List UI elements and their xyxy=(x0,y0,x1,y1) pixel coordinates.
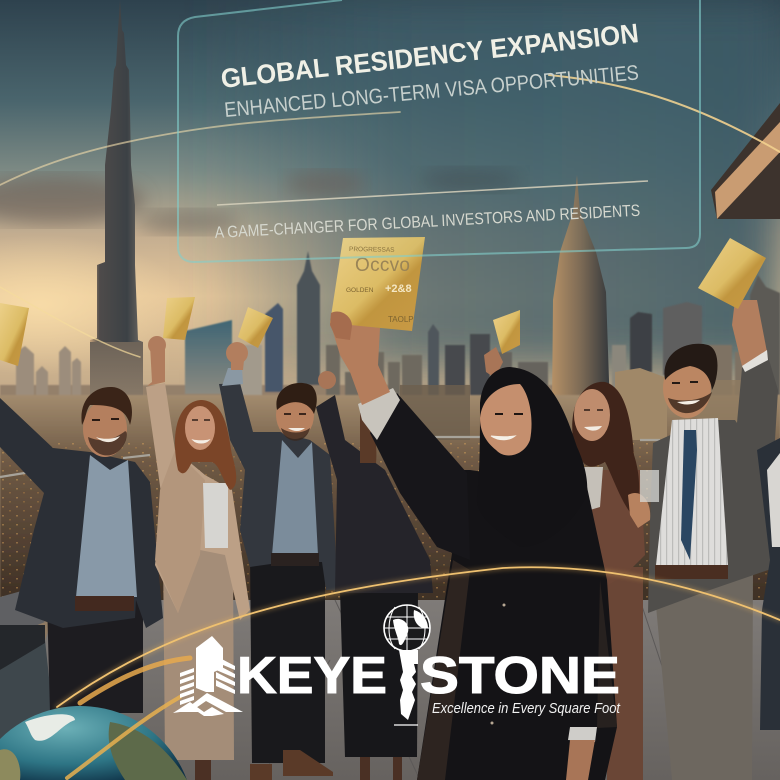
big golden visa card: TAOLP xyxy=(388,315,414,324)
bench at left xyxy=(0,590,45,670)
person 5: woman in black hijab xyxy=(330,322,617,780)
person 2: woman in beige blazer xyxy=(146,336,250,780)
city below the horizon xyxy=(0,368,780,610)
big golden visa card: Occvo xyxy=(355,255,410,276)
KEYESTONE logo xyxy=(173,605,621,725)
rooftop canopy xyxy=(711,103,780,219)
gold card: right man xyxy=(698,238,766,309)
person 6: woman in brown blazer xyxy=(572,382,645,780)
Burj Khalifa tower xyxy=(90,0,143,450)
globe at bottom left xyxy=(0,706,187,780)
right skyscraper xyxy=(552,175,610,410)
big golden visa card xyxy=(330,237,425,340)
KEYESTONE logo: STONE xyxy=(420,647,620,705)
logo icon: buildings and houses xyxy=(173,636,243,716)
subtitle: ENHANCED LONG-TERM VISA OPPORTUNITIES xyxy=(223,61,640,122)
terrace floor xyxy=(0,600,780,780)
person 7: man with navy tie and gold card xyxy=(628,300,778,780)
gold card: woman xyxy=(163,297,195,340)
Burj base podium xyxy=(90,342,143,450)
floor paving lines xyxy=(0,600,700,780)
big golden visa card: GOLDEN xyxy=(346,287,374,294)
distant skyline xyxy=(0,251,780,455)
logo wordmark: KEYE xyxy=(237,647,387,705)
big golden visa card: +2&8 xyxy=(385,283,412,295)
logo icon: globe key xyxy=(384,605,430,725)
title: GLOBAL RESIDENCY EXPANSION xyxy=(219,18,640,94)
person 4: woman in black xyxy=(316,371,433,780)
logo slogan: Excellence in Every Square Foot xyxy=(432,701,621,717)
person at right: white shirt xyxy=(767,453,780,547)
person at far right edge xyxy=(757,438,780,730)
gold card: man 3 xyxy=(238,307,273,348)
terrace railing xyxy=(0,437,660,477)
person 3: man in grey suit xyxy=(219,342,338,780)
arm and small gold card behind hijab woman xyxy=(484,310,520,378)
glass panel: heading board xyxy=(178,0,700,262)
golden card: far left xyxy=(0,303,29,366)
tagline: A GAME-CHANGER FOR GLOBAL INVESTORS AND RESIDENTS xyxy=(214,202,641,242)
person 1: man in dark suit xyxy=(0,387,163,713)
divider line xyxy=(217,181,648,205)
big golden visa card: PROGRESSAS xyxy=(349,246,395,254)
